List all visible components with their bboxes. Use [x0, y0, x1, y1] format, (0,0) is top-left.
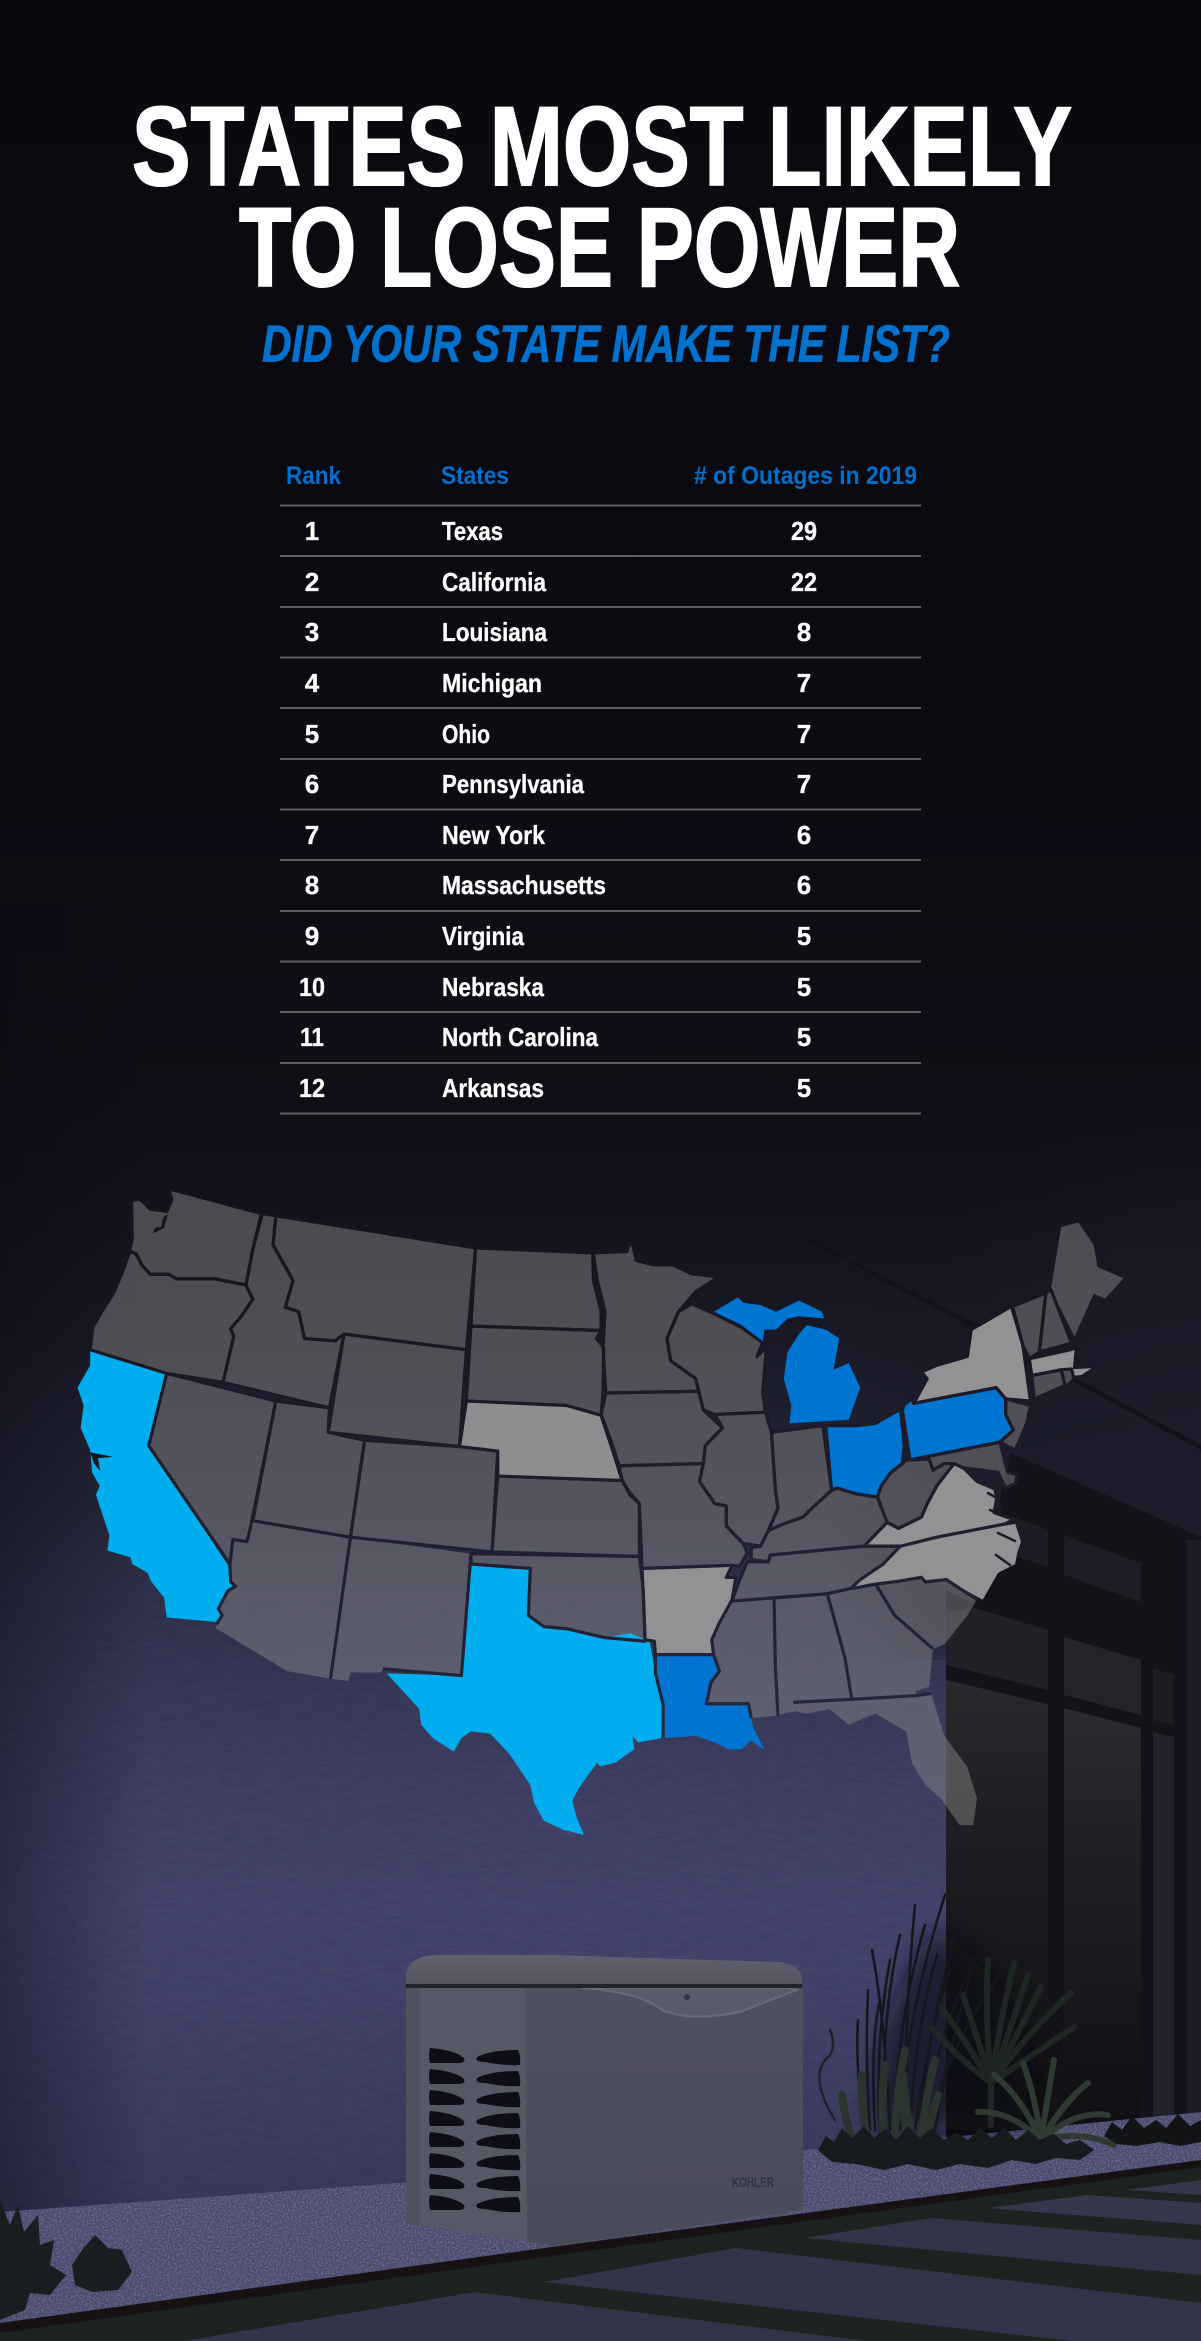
state: Arizona [215, 1521, 350, 1679]
lower panes [946, 1680, 1048, 2140]
coastal inlets: Puget Sound and San Francisco Bay [90, 1214, 168, 1472]
upper panes [1014, 1517, 1048, 1567]
row 9: 5 [797, 921, 811, 951]
row 5: Ohio [442, 719, 490, 749]
row 12: 12 [299, 1073, 325, 1103]
row 8: Massachusetts [442, 870, 606, 900]
state: South Carolina [876, 1577, 977, 1649]
row 5: 5 [305, 719, 319, 749]
state: New Jersey [1000, 1399, 1031, 1450]
state: Wyoming [328, 1334, 466, 1447]
row 4: 7 [797, 668, 811, 698]
row 1: 29 [791, 516, 817, 546]
table: outages by state [280, 462, 921, 1114]
left vignette [0, 900, 150, 2341]
row 7: 7 [305, 820, 319, 850]
state: Kansas [492, 1476, 639, 1556]
row 3: 8 [797, 617, 811, 647]
low shrubs at plant base [818, 2126, 1094, 2170]
lawn [0, 2165, 1201, 2341]
generator corner strip [406, 1988, 420, 2226]
state: Oklahoma [471, 1554, 645, 1641]
row 3 [305, 617, 811, 647]
row 1: Texas [442, 516, 503, 546]
roof line [805, 1236, 1201, 1450]
map of the United States [78, 1189, 1124, 1835]
row 3: Louisiana [442, 617, 547, 647]
state: Illinois [700, 1412, 778, 1546]
state: North Carolina (highlighted) [853, 1524, 1021, 1600]
row 1: 1 [305, 516, 319, 546]
state: New York (highlighted) [914, 1306, 1031, 1403]
generator lid seam [406, 1984, 802, 1988]
row 6: 7 [797, 769, 811, 799]
state: Michigan upper peninsula (highlighted) [714, 1297, 824, 1342]
state: Maryland [910, 1442, 1017, 1488]
state: Alabama [774, 1595, 852, 1716]
row 8: 8 [305, 870, 319, 900]
middle panes [946, 1608, 1048, 1690]
right wall strip [1186, 1540, 1201, 2140]
state: Ohio (highlighted) [826, 1409, 904, 1497]
title [132, 84, 1072, 310]
row 6: Pennsylvania [442, 769, 584, 799]
state: Vermont [1013, 1293, 1046, 1359]
state: Missouri [619, 1464, 747, 1568]
row 10: 5 [797, 972, 811, 1002]
row 5 [305, 719, 811, 749]
row 6 [305, 769, 811, 799]
row 9: 9 [305, 921, 319, 951]
row 7: New York [442, 820, 545, 850]
row 2: California [442, 567, 546, 597]
state: Connecticut [1032, 1370, 1065, 1399]
state: Georgia [828, 1584, 933, 1699]
row 5: 7 [797, 719, 811, 749]
wall texture [0, 1600, 946, 2230]
gravel bed [0, 2112, 1201, 2323]
right plants: reeds and agaves [818, 1895, 1201, 2170]
generator [406, 1955, 803, 2246]
generator lock [684, 1994, 690, 2000]
generator side panel [406, 1988, 529, 2242]
row 1 [305, 516, 817, 546]
row 11 [300, 1022, 811, 1052]
state: West Virginia [877, 1459, 954, 1528]
row 3: 3 [305, 617, 319, 647]
row 10 [299, 972, 811, 1002]
state: Florida [793, 1693, 977, 1825]
eastern states [593, 1222, 1124, 1825]
row 11: 11 [300, 1022, 324, 1052]
row 2: 2 [305, 567, 319, 597]
row 7 [305, 820, 811, 850]
row 2: 22 [791, 567, 817, 597]
subtitle: DID YOUR STATE MAKE THE LIST? [262, 316, 950, 374]
state: Nevada [149, 1373, 276, 1564]
building: roof, facade and windows [805, 1100, 1201, 2140]
state: Virginia (highlighted) [864, 1464, 1013, 1546]
state: Michigan lower peninsula (highlighted) [784, 1325, 860, 1423]
title: TO LOSE POWER [239, 185, 960, 310]
western states [78, 1189, 663, 1835]
row 12: Arkansas [442, 1073, 544, 1103]
edging strip [0, 2160, 1201, 2333]
state: California (highlighted) [78, 1350, 236, 1622]
state: New Mexico [331, 1537, 471, 1681]
state: Maine [1051, 1222, 1124, 1336]
row 12: 5 [797, 1073, 811, 1103]
vine [819, 2030, 835, 2120]
row 4 [305, 668, 811, 698]
generator brand label: KOHLER [732, 2174, 774, 2190]
row 4: Michigan [442, 668, 542, 698]
state: Tennessee [732, 1546, 900, 1601]
table header: States [441, 462, 509, 490]
row 7: 6 [797, 820, 811, 850]
state: Rhode Island [1061, 1369, 1074, 1385]
state: Nebraska (highlighted) [459, 1401, 622, 1481]
state: North Dakota [471, 1248, 601, 1331]
left shrubs [0, 2200, 132, 2320]
near agave [978, 2060, 1114, 2145]
state: Louisiana (highlighted) [655, 1655, 765, 1750]
state borders [90, 1189, 1098, 1738]
state: Washington [130, 1189, 261, 1285]
roof glow [821, 1100, 1201, 1660]
state: Wisconsin [667, 1304, 766, 1414]
row 11: North Carolina [442, 1022, 598, 1052]
state: Idaho [223, 1214, 344, 1408]
state: Indiana [768, 1426, 832, 1531]
state: Texas (highlighted) [387, 1564, 663, 1835]
left foliage [842, 2050, 938, 2150]
table header: Rank [286, 462, 341, 490]
generator front panel [525, 1988, 803, 2246]
row 9: Virginia [442, 921, 524, 951]
state: Mississippi [706, 1600, 778, 1718]
generator vents [429, 2048, 520, 2212]
table header: # of Outages in 2019 [694, 462, 917, 490]
generator handle recess [582, 1988, 797, 2017]
coastal inlets: Virginia and North Carolina [988, 1493, 1015, 1565]
row 8: 6 [797, 870, 811, 900]
row 11: 5 [797, 1022, 811, 1052]
row 2 [305, 567, 817, 597]
state: Massachusetts (highlighted) [1029, 1347, 1098, 1377]
state: South Dakota [466, 1326, 604, 1415]
stepping stones [184, 2180, 1201, 2341]
state: New Hampshire [1039, 1289, 1071, 1352]
state: Utah [253, 1401, 365, 1537]
reeds [857, 1895, 1000, 2130]
state: Colorado [350, 1440, 498, 1552]
state: Montana [273, 1216, 476, 1350]
row 8 [305, 870, 811, 900]
generator lid [406, 1955, 802, 1986]
row 12 [299, 1073, 811, 1103]
far shrubs [1104, 2114, 1201, 2146]
row 10: 10 [299, 972, 325, 1002]
facade [946, 1453, 1201, 2140]
row 4: 4 [305, 668, 320, 698]
state: Iowa [601, 1391, 722, 1466]
state: Oregon [90, 1252, 253, 1382]
state: Arkansas (highlighted) [642, 1565, 736, 1655]
reed shadow mass [870, 1930, 1030, 2130]
state: Minnesota [593, 1245, 719, 1393]
state: Pennsylvania (highlighted) [902, 1388, 1013, 1460]
table header [286, 462, 917, 490]
tall agave [931, 1960, 1074, 2125]
state: Kentucky [751, 1488, 887, 1562]
row 9 [305, 921, 811, 951]
row 6: 6 [305, 769, 319, 799]
row 10: Nebraska [442, 972, 544, 1002]
